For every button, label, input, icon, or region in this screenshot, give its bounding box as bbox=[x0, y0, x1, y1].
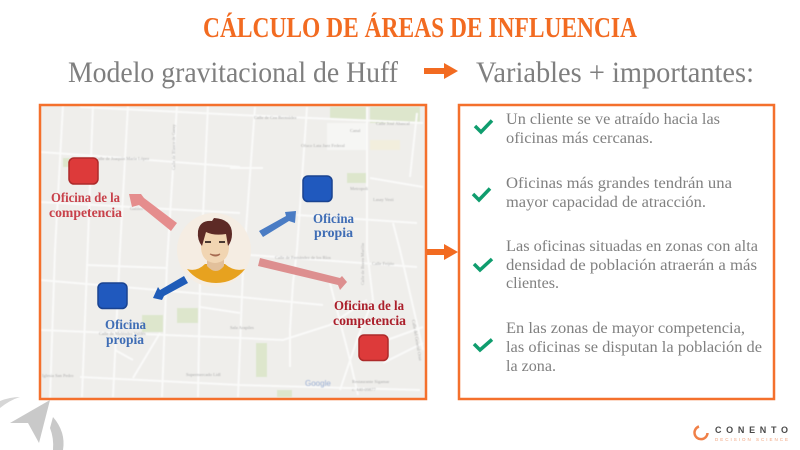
label: own office top right: propia bbox=[314, 225, 353, 240]
label: own office bottom left: Oficina bbox=[105, 317, 146, 332]
map labels bbox=[42, 115, 423, 392]
map labels: Calle de Fernández de los Ríos bbox=[275, 255, 331, 260]
subtitle: variables: Variables + importantes: bbox=[476, 56, 754, 89]
map labels: Calle José Abascal bbox=[376, 121, 410, 126]
label: competitor office top left bbox=[49, 190, 122, 220]
text: variable 3: Las oficinas situadas en zonas con alta bbox=[506, 238, 758, 255]
map roads bbox=[40, 105, 423, 399]
text: variable 2: mayor capacidad de atracción. bbox=[506, 194, 706, 211]
label: competitor office bottom right: competencia bbox=[333, 313, 406, 328]
icon: red office top left bbox=[69, 158, 98, 184]
map labels: Calle de Bravo Murillo bbox=[360, 242, 365, 285]
map labels: Supermercado Lidl bbox=[186, 372, 221, 377]
icon: check 2 bbox=[473, 188, 490, 200]
map labels: Calle del General Oraa bbox=[411, 319, 423, 361]
icon: logo ring bbox=[695, 426, 708, 439]
variable 3 bbox=[474, 238, 758, 292]
logo tagline: DECISION SCIENCE bbox=[715, 437, 788, 442]
label: own office top right: Oficina bbox=[313, 211, 354, 226]
logo: Conento bbox=[695, 425, 788, 442]
google mark: Google bbox=[305, 379, 331, 388]
icon: check 4 bbox=[474, 340, 492, 350]
map labels: Calle de Meléndez Valdés bbox=[99, 331, 146, 336]
label: competitor office top left: Oficina de la bbox=[51, 190, 120, 205]
text: variable 1: Un cliente se ve atraído hacia las bbox=[506, 111, 720, 128]
text: variable 2: Oficinas más grandes tendrán una bbox=[506, 175, 732, 192]
map labels: Metropoli bbox=[350, 186, 369, 191]
arrow: to competitor bottom right bbox=[258, 258, 347, 290]
map labels: Iglesia San Pedro bbox=[42, 373, 74, 378]
label: competitor office bottom right: Oficina de la bbox=[334, 298, 404, 313]
map labels: Lasay Vesti bbox=[373, 197, 395, 202]
label: own office bottom left bbox=[105, 317, 146, 347]
icon: check 3 bbox=[474, 259, 492, 270]
icon: red office bottom right bbox=[359, 335, 388, 360]
logo text: CONENTO bbox=[715, 425, 788, 435]
map labels: Sala Arapiles bbox=[230, 325, 254, 330]
label: competitor office top left: competencia bbox=[49, 205, 122, 220]
map labels: c. 440-09877 bbox=[352, 387, 376, 392]
map labels: Ofuco Lata Jaez Federal bbox=[301, 143, 346, 148]
map parks bbox=[63, 107, 420, 397]
variable 2 bbox=[473, 175, 732, 211]
map labels: Calle de Cea Bermúdez bbox=[254, 115, 297, 120]
label: competitor office bottom right bbox=[333, 298, 406, 328]
arrow: to competitor top left bbox=[129, 194, 177, 231]
arrow: header bbox=[424, 63, 458, 79]
map labels: Restaurante Sigamar bbox=[352, 379, 390, 384]
arrow: to own office top right bbox=[259, 211, 296, 237]
text: variable 3: clientes. bbox=[506, 275, 559, 292]
icon: blue office bottom left bbox=[98, 283, 127, 308]
map labels: Galileo Carlos bbox=[130, 206, 156, 211]
icon: watermark compass bbox=[0, 397, 64, 450]
icon: blue office top right bbox=[303, 176, 332, 202]
arrow: to own office bottom left bbox=[153, 276, 188, 300]
text: variable 4: las oficinas se disputan la población de bbox=[506, 339, 762, 356]
map labels: Canal bbox=[350, 128, 361, 133]
icon: check 1 bbox=[475, 120, 492, 132]
text: variable 1: oficinas más cercanas. bbox=[506, 130, 653, 147]
arrow: map to variables bbox=[427, 244, 458, 260]
icon: person bbox=[177, 213, 251, 287]
map labels: Calle de Joaquín María López bbox=[95, 156, 149, 161]
map border bbox=[40, 105, 426, 399]
map labels: Calle Feijóo bbox=[372, 261, 395, 266]
subtitle: Huff model: Modelo gravitacional de Huff bbox=[68, 56, 398, 89]
title: CÁLCULO DE ÁREAS DE INFLUENCIA bbox=[203, 13, 638, 44]
panel: variables bbox=[459, 105, 774, 399]
map labels: Calle de Blasco de Garay bbox=[171, 124, 176, 170]
text: variable 3: densidad de población atraerán a más bbox=[506, 257, 757, 274]
label: own office bottom left: propia bbox=[106, 332, 144, 347]
text: variable 4: En las zonas de mayor competencia, bbox=[506, 320, 745, 337]
panel: map bbox=[40, 105, 426, 399]
variable 4 bbox=[474, 320, 762, 375]
variable 1 bbox=[475, 111, 720, 147]
label: own office top right bbox=[313, 211, 354, 240]
text: variable 4: la zona. bbox=[506, 358, 556, 375]
